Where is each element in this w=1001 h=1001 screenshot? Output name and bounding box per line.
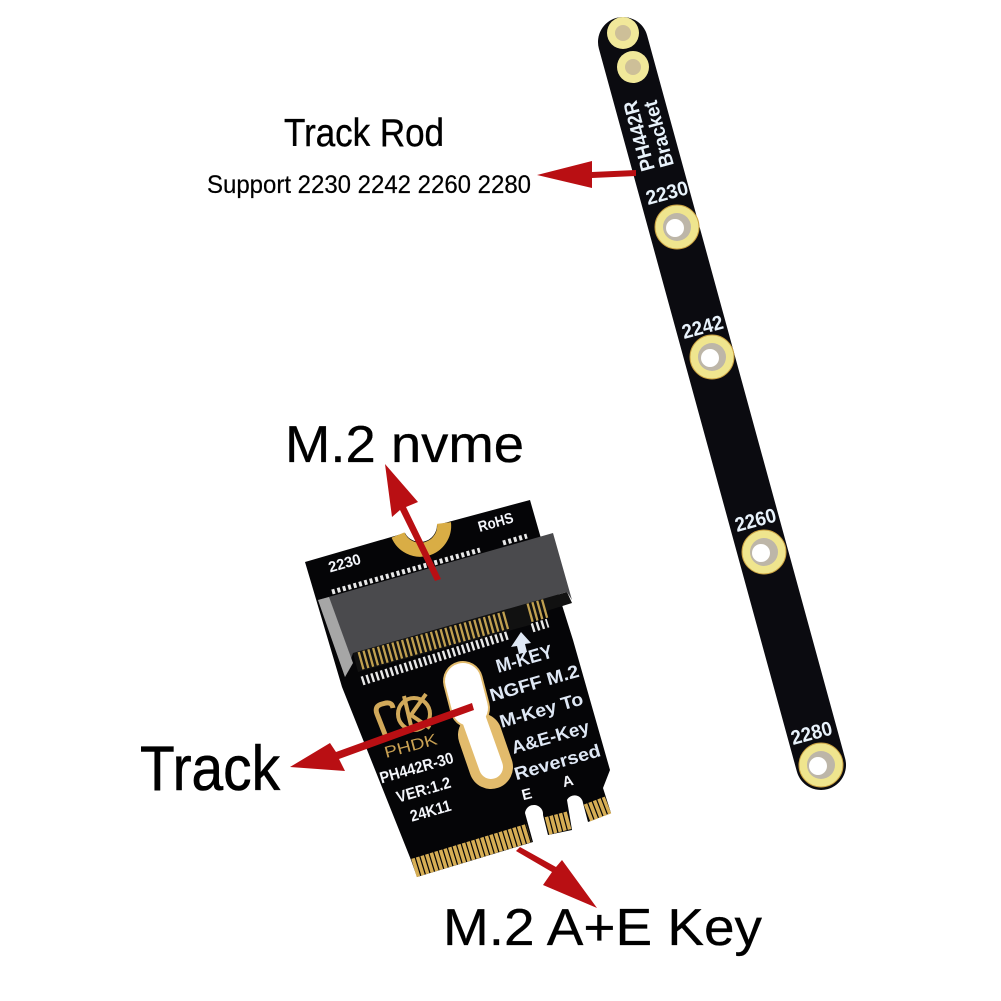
white card text: model: A [561,772,575,791]
rod labels: Bracket [640,98,679,169]
white card text: key description: NGFF M.2 [487,661,581,706]
white card text: key description: M-KEY [494,642,556,678]
rod body [623,42,821,765]
mounting slot [463,681,491,767]
white card text: model: E [520,785,534,804]
rod labels [620,98,835,750]
white card text: model: VER:1.2 [395,775,453,807]
gold edge connector [414,805,608,868]
label: M.2 A+E Key: M.2 A+E Key [443,899,762,957]
label: M.2 nvme: M.2 nvme [285,416,524,474]
panel: M.2 adapter card [305,500,611,877]
rod labels: 2242 [680,312,726,344]
logo: PHDK [376,694,440,762]
panel: track rod bracket [607,17,843,787]
white card text: model: 2230 [327,551,363,576]
connector solder pins [332,536,548,681]
arrow: to M.2 nvme [385,464,441,581]
arrow: to track [290,703,474,771]
logo: PHDK: PHDK [383,731,440,762]
white card text: model: PH442R-30 [378,750,456,787]
rod labels: PH442R [620,98,660,173]
white card text: model: RoHS [476,510,515,536]
rod labels: 2260 [733,505,779,537]
arrow: to track rod [537,161,636,188]
arrow: to M.2 A+E key [516,847,597,908]
white card text: model [327,510,575,826]
M.2 connector housing [318,533,572,677]
white card text: key description [487,642,603,784]
white card text: key description: A&E-Key [509,717,592,758]
label: Track: Track [140,734,280,804]
white card text: key description: Reversed [512,740,603,784]
card body [305,500,611,877]
heading: Track Rod: Track Rod [284,112,444,155]
gold half ring [398,523,444,550]
icon: rod mounting holes [607,17,843,787]
rod labels: 2230 [644,177,691,210]
icon: white up arrow [511,632,531,654]
connector opening and gold pins [353,592,572,672]
rod labels: 2280 [789,718,835,750]
text: supported lengths: Support 2230 2242 2260 2280 [207,171,531,199]
white card text: model: 24K11 [408,798,453,826]
white card text: key description: M-Key To [497,689,585,732]
